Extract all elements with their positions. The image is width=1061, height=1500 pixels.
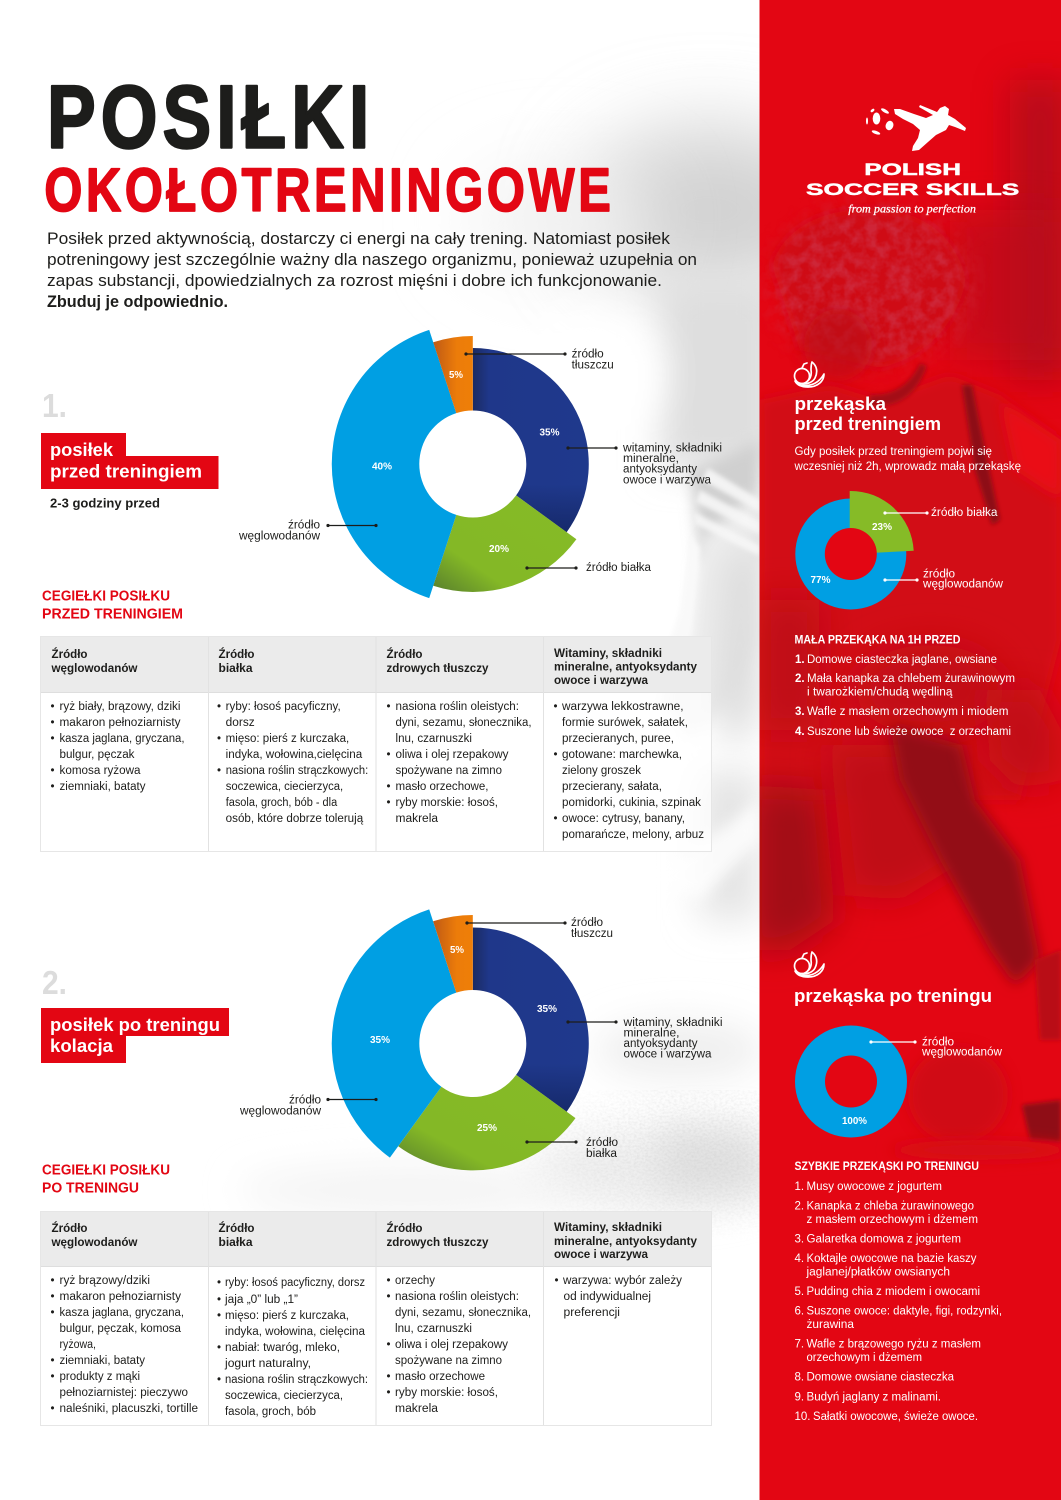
column: białko: Źródło: [218, 648, 254, 661]
slice: 25%: [398, 1075, 576, 1170]
intro text: Zbuduj je odpowiednio.: [47, 293, 228, 311]
column: tłuszcze: masło orzechowe,: [396, 781, 488, 793]
column: tłuszcze: makrela: [396, 813, 439, 825]
heading: cegiełki posiłku po treningu: PO TRENINGU: [42, 1180, 139, 1196]
column: witaminy: [554, 1222, 698, 1319]
list: szybkie przekąski po treningu: Sałatki owocowe, świeże owoce.: [813, 1411, 978, 1423]
column: białko: •: [217, 1374, 221, 1386]
column: witaminy: •: [554, 1275, 559, 1287]
column: witaminy: formie surówek, sałatek,: [562, 717, 688, 729]
intro text: zapas substancji, dpowiedzialnych za rozrost mięśni i dobre ich funkcjonowanie.: [47, 272, 662, 290]
column: węglowodany: •: [50, 781, 55, 793]
column: tłuszcze: Źródło: [386, 1222, 422, 1235]
column: witaminy: •: [554, 749, 558, 761]
column: węglowodany: naleśniki, placuszki, tortille: [60, 1403, 198, 1415]
column: węglowodany: kasza jaglana, gryczana,: [60, 1307, 184, 1319]
list: szybkie przekąski po treningu: 4.: [794, 1253, 804, 1265]
column: białko: •: [217, 1310, 221, 1322]
column: tłuszcze: lnu, czarnuszki: [396, 733, 472, 745]
chart hole: [825, 1056, 877, 1108]
label: posiłek po treningu kolacja: kolacja: [50, 1035, 114, 1056]
chart labels: mineralne,: [624, 1028, 680, 1040]
heading: przekąska po treningu: przekąska po treningu: [794, 985, 992, 1006]
column: witaminy: zielony groszek: [562, 765, 641, 777]
intro text: [47, 230, 697, 311]
chart labels: białka: [586, 1148, 618, 1160]
percentages: 35%: [537, 1003, 558, 1015]
list: szybkie przekąski po treningu: żurawina: [806, 1319, 855, 1331]
heading: POSIŁKI: POSIŁKI: [47, 68, 369, 167]
chart label: źródło: [922, 1036, 954, 1048]
list: szybkie przekąski po treningu: 3.: [794, 1234, 804, 1246]
column: tłuszcze: nasiona roślin oleistych:: [395, 1291, 519, 1303]
text: przekąska description: wczesniej niż 2h, wprowadz małą przekąskę: [793, 461, 1021, 473]
column: witaminy: od indywidualnej: [564, 1291, 651, 1303]
column: białko: •: [217, 1342, 221, 1354]
column: witaminy: •: [554, 701, 558, 713]
column: białko: •: [217, 765, 221, 777]
list: mała przekąska na 1h przed: 1.: [795, 654, 805, 666]
column: tłuszcze: spożywane na zimno: [396, 765, 502, 777]
chart labels: źródło białka: [586, 562, 652, 574]
column: węglowodany: ryżowa,: [60, 1339, 96, 1351]
chart labels: węglowodanów: [238, 530, 321, 542]
list: szybkie przekąski po treningu: 6.: [794, 1306, 804, 1318]
chart labels: źródło: [923, 568, 955, 580]
column: białko: •: [217, 733, 221, 745]
player photo in red duotone: [750, 80, 1061, 1160]
slice: 5%: [433, 336, 473, 413]
column: tłuszcze: •: [386, 781, 391, 793]
column: węglowodany: ryż brązowy/dziki: [60, 1275, 150, 1287]
text: przekąska description: [793, 446, 1021, 473]
list: mała przekąska na 1h przed: Mała kanapka za chlebem żurawinowym: [807, 673, 1015, 685]
list: mała przekąska na 1h przed: MAŁA PRZEKĄKA NA 1H PRZED: [794, 634, 960, 646]
heading: przekąska przed treningiem: przekąska: [794, 393, 887, 414]
list: szybkie przekąski po treningu: SZYBKIE PRZEKĄSKI PO TRENINGU: [794, 1161, 979, 1173]
column: węglowodany: ryż biały, brązowy, dziki: [60, 701, 180, 713]
column: węglowodany: ziemniaki, bataty: [60, 781, 146, 793]
slice: 35%: [473, 348, 589, 532]
column: białko: jaja „0” lub „1”: [224, 1294, 298, 1306]
column: węglowodany: •: [50, 1275, 55, 1287]
heading: cegiełki posiłku przed treningiem: CEGIEŁKI POSIŁKU: [42, 588, 170, 604]
list: mała przekąska na 1h przed: Domowe ciasteczka jaglane, owsiane: [807, 654, 997, 666]
percentages: [370, 944, 558, 1134]
column: węglowodany: •: [50, 1371, 55, 1383]
list: szybkie przekąski po treningu: [794, 1161, 1002, 1423]
heading: przekąska przed treningiem: [794, 393, 941, 434]
percentages: 35%: [370, 1034, 391, 1046]
list: szybkie przekąski po treningu: 7.: [794, 1338, 804, 1350]
column: witaminy: owoce: cytrusy, banany,: [562, 813, 685, 825]
column: białko: •: [217, 701, 221, 713]
intro text: Posiłek przed aktywnością, dostarczy ci energi na cały trening. Natomiast posiłek: [47, 230, 671, 248]
column: węglowodany: bulgur, pęczak: [60, 749, 135, 761]
section number 1: 1.: [42, 387, 67, 424]
background: grey player photo: [316, 94, 760, 1224]
column: białko: ryby: łosoś pacyficzny,: [226, 701, 341, 713]
list: szybkie przekąski po treningu: Wafle z brązowego ryżu z masłem: [806, 1338, 981, 1350]
column: witaminy: preferencji: [564, 1307, 620, 1319]
percentages: 23%: [872, 521, 893, 533]
logo: Polish Soccer Skills: SOCCER SKILLS: [806, 180, 1019, 199]
column: węglowodany: makaron pełnoziarnisty: [60, 1291, 181, 1303]
slice: 23%: [850, 491, 914, 554]
column: białko: nasiona roślin strączkowych:: [226, 765, 368, 777]
column: tłuszcze: •: [386, 1275, 391, 1287]
percentages: [372, 369, 560, 555]
heading: OKOŁOTRENINGOWE: OKOŁOTRENINGOWE: [44, 156, 611, 224]
chart labels: źródło: [288, 520, 320, 532]
column: białko: nasiona roślin strączkowych:: [225, 1374, 368, 1386]
percentages: 5%: [449, 369, 464, 381]
list: mała przekąska na 1h przed: i twarożkiem/chudą wędliną: [807, 686, 953, 698]
chart labels: [239, 917, 722, 1160]
heading: cegiełki posiłku przed treningiem: PRZED TRENINGIEM: [42, 606, 183, 622]
column: tłuszcze: [386, 648, 532, 825]
donut chart 4: [795, 1026, 1003, 1138]
chart labels: źródło: [586, 1137, 618, 1149]
column: witaminy: warzywa lekkostrawne,: [561, 701, 684, 713]
list: mała przekąska na 1h przed: Wafle z masłem orzechowym i miodem: [807, 706, 1008, 718]
column: tłuszcze: •: [386, 749, 391, 761]
percentages: 40%: [372, 460, 393, 472]
column: węglowodany: [50, 648, 184, 793]
column: węglowodany: makaron pełnoziarnisty: [60, 717, 181, 729]
column: witaminy: przecieranych, puree,: [562, 733, 674, 745]
list: szybkie przekąski po treningu: Koktajle owocowe na bazie kaszy: [806, 1253, 977, 1265]
column: tłuszcze: •: [386, 1291, 391, 1303]
chart labels: owoce i warzywa: [624, 1048, 712, 1060]
list: szybkie przekąski po treningu: Pudding chia z miodem i owocami: [806, 1286, 980, 1298]
chart labels: źródło białka: [931, 507, 998, 519]
logo tagline: from passion to perfection: [848, 202, 976, 216]
column: węglowodany: Źródło: [52, 1222, 88, 1235]
column: tłuszcze: spożywane na zimno: [395, 1355, 502, 1367]
list: mała przekąska na 1h przed: Suszone lub świeże owoce z orzechami: [807, 726, 1011, 738]
chart labels: witaminy, składniki: [622, 442, 722, 454]
column: tłuszcze: oliwa i olej rzepakowy: [396, 749, 509, 761]
heading: cegiełki posiłku po treningu: [42, 1162, 170, 1196]
column: białko: mięso: pierś z kurczaka,: [225, 1310, 349, 1322]
column: tłuszcze: makrela: [395, 1403, 439, 1415]
text: przekąska description: Gdy posiłek przed treningiem pojwi się: [794, 446, 992, 458]
icon: snack: [794, 952, 824, 977]
leader lines: [327, 353, 617, 569]
chart labels: tłuszczu: [572, 360, 614, 372]
percentages: 25%: [477, 1122, 498, 1134]
column: białko: indyka, wołowina,cielęcina: [226, 749, 363, 761]
column: tłuszcze: oliwa i olej rzepakowy: [395, 1339, 508, 1351]
column: tłuszcze: dyni, sezamu, słonecznika,: [395, 1307, 531, 1319]
leader line: [870, 1041, 916, 1043]
column: węglowodany: bulgur, pęczak, komosa: [60, 1323, 182, 1335]
icon: kicking player: [894, 105, 966, 151]
slice: 40%: [332, 330, 456, 598]
column: tłuszcze: •: [386, 701, 391, 713]
percentages: 5%: [450, 944, 465, 956]
list: szybkie przekąski po treningu: Domowe owsiane ciasteczka: [806, 1372, 955, 1384]
column: węglowodany: [50, 1222, 198, 1415]
slice: 5%: [433, 915, 473, 993]
column: węglowodany: Źródło: [52, 648, 88, 661]
table 2: [40, 1212, 712, 1426]
column: witaminy: owoce i warzywa: [554, 675, 649, 687]
chart labels: antyoksydanty: [623, 464, 697, 476]
heading: cegiełki posiłku po treningu: CEGIEŁKI POSIŁKU: [42, 1162, 170, 1178]
chart labels: antyoksydanty: [624, 1038, 698, 1050]
column: witaminy: •: [554, 813, 558, 825]
column: węglowodany: węglowodanów: [50, 1237, 138, 1249]
label: posiłek przed treningiem: przed treningiem: [50, 460, 202, 482]
title: [44, 68, 611, 224]
column: witaminy: warzywa: wybór zależy: [562, 1275, 682, 1287]
list: mała przekąska na 1h przed: 2.: [795, 673, 805, 685]
panel: red sidebar: [750, 0, 1061, 1500]
logo wordmark: POLISH: [864, 160, 961, 179]
column: tłuszcze: masło orzechowe: [395, 1371, 485, 1383]
column: białko: mięso: pierś z kurczaka,: [226, 733, 349, 745]
chart labels: witaminy, składniki: [622, 1017, 722, 1029]
list: szybkie przekąski po treningu: orzechowym i dżemem: [806, 1352, 922, 1364]
chart label: węglowodanów: [921, 1046, 1003, 1058]
column: tłuszcze: zdrowych tłuszczy: [386, 663, 489, 675]
column: tłuszcze: •: [386, 1371, 391, 1383]
column: witaminy: [554, 648, 704, 841]
column: tłuszcze: [386, 1222, 531, 1415]
chart labels: [238, 348, 722, 574]
chart label: [921, 1036, 1003, 1058]
list: szybkie przekąski po treningu: jaglanej/płatków owsianych: [805, 1266, 950, 1278]
list: szybkie przekąski po treningu: 1.: [794, 1181, 804, 1193]
column: węglowodany: •: [50, 733, 55, 745]
slice: 35% blue: [332, 909, 456, 1158]
list: szybkie przekąski po treningu: Musy owocowe z jogurtem: [806, 1181, 942, 1193]
column: węglowodany: produkty z mąki: [60, 1371, 140, 1383]
slice: 35%: [473, 928, 589, 1112]
chart labels: węglowodanów: [922, 578, 1004, 590]
column: witaminy: Witaminy, składniki: [554, 1222, 662, 1234]
column: witaminy: mineralne, antyoksydanty: [554, 662, 698, 674]
column: białko: [217, 1222, 368, 1418]
column: białko: indyka, wołowina, cielęcina: [225, 1326, 366, 1338]
list: mała przekąska na 1h przed: 4.: [795, 726, 805, 738]
percentages: 35%: [540, 426, 560, 438]
column: tłuszcze: orzechy: [395, 1275, 435, 1287]
column: węglowodany: kasza jaglana, gryczana,: [60, 733, 184, 745]
section number 2: 2.: [42, 964, 67, 1001]
column: białko: białka: [218, 1237, 253, 1249]
column: węglowodany: •: [50, 1403, 55, 1415]
list: szybkie przekąski po treningu: 2.: [794, 1200, 804, 1212]
column: białko: nabiał: twaróg, mleko,: [225, 1342, 340, 1354]
list: szybkie przekąski po treningu: 9.: [794, 1392, 804, 1404]
column: białko: Źródło: [218, 1222, 254, 1235]
column: węglowodany: komosa ryżowa: [60, 765, 141, 777]
chart labels: źródło: [572, 348, 604, 360]
label: posiłek przed treningiem: [41, 433, 218, 489]
list: szybkie przekąski po treningu: Galaretka domowa z jogurtem: [806, 1234, 961, 1246]
column: witaminy: mineralne, antyoksydanty: [554, 1236, 698, 1248]
chart labels: węglowodanów: [239, 1106, 322, 1118]
column: tłuszcze: •: [386, 1339, 391, 1351]
list: mała przekąska na 1h przed: [794, 634, 1015, 738]
chart labels: mineralne,: [623, 453, 679, 465]
column: węglowodany: •: [50, 1355, 55, 1367]
leader lines: [327, 922, 617, 1143]
column: białko: dorsz: [226, 717, 255, 729]
column: białko: soczewica, ciecierzyca,: [225, 1390, 343, 1402]
heading: cegiełki posiłku przed treningiem: [42, 588, 183, 622]
percentage: 100%: [842, 1115, 868, 1127]
donut chart 3: [795, 491, 1004, 610]
list: mała przekąska na 1h przed: 3.: [795, 706, 805, 718]
donut chart 1: [238, 330, 722, 598]
column: witaminy: gotowane: marchewka,: [562, 749, 682, 761]
leader lines: [884, 512, 928, 581]
column: białko: [217, 648, 368, 825]
column: tłuszcze: zdrowych tłuszczy: [386, 1237, 489, 1249]
column: witaminy: pomarańcze, melony, arbuz: [562, 829, 704, 841]
label: posiłek przed treningiem: posiłek: [50, 439, 114, 460]
column: tłuszcze: lnu, czarnuszki: [395, 1323, 472, 1335]
column: węglowodany: węglowodanów: [50, 663, 138, 675]
column: białko: soczewica, ciecierzyca,: [226, 781, 343, 793]
percentages: [810, 521, 893, 586]
column: węglowodany: •: [50, 701, 55, 713]
chart labels: owoce i warzywa: [623, 474, 712, 486]
list: szybkie przekąski po treningu: 8.: [794, 1372, 804, 1384]
column: węglowodany: •: [50, 1307, 55, 1319]
column: tłuszcze: ryby morskie: łosoś,: [395, 1387, 498, 1399]
column: węglowodany: •: [50, 1291, 55, 1303]
icon: ball: [866, 107, 895, 136]
column: białko: fasola, groch, bób - dla: [226, 797, 338, 809]
percentages: 77%: [810, 574, 831, 586]
column: witaminy: owoce i warzywa: [554, 1249, 649, 1261]
icon: snack: [794, 362, 824, 387]
column: białko: osób, które dobrze tolerują: [226, 813, 364, 825]
donut chart 2: [239, 909, 722, 1170]
column: witaminy: przecierany, sałata,: [562, 781, 662, 793]
column: witaminy: pomidorki, cukinia, szpinak: [562, 797, 701, 809]
column: tłuszcze: dyni, sezamu, słonecznika,: [396, 717, 532, 729]
column: białko: jogurt naturalny,: [224, 1358, 311, 1370]
logo: Polish Soccer Skills: [806, 105, 1019, 216]
list: szybkie przekąski po treningu: z masłem orzechowym i dżemem: [806, 1214, 978, 1226]
column: tłuszcze: Źródło: [386, 648, 422, 661]
subheading: 2-3 godziny przed: 2-3 godziny przed: [50, 496, 160, 510]
column: białko: fasola, groch, bób: [225, 1406, 316, 1418]
column: tłuszcze: •: [386, 797, 391, 809]
chart labels: [922, 507, 1004, 590]
slice: 20%: [433, 495, 576, 592]
chart labels: tłuszczu: [571, 928, 613, 940]
label: posiłek po treningu kolacja: [41, 1008, 229, 1063]
table 1: [40, 636, 712, 852]
chart hole: [825, 528, 877, 580]
heading: przekąska przed treningiem: przed treningiem: [794, 413, 941, 434]
slice: 100%: [795, 1026, 907, 1138]
list: szybkie przekąski po treningu: Budyń jaglany z malinami.: [806, 1392, 941, 1404]
column: białko: •: [217, 1277, 221, 1289]
column: witaminy: Witaminy, składniki: [554, 648, 662, 660]
label: posiłek po treningu kolacja: posiłek po treningu: [50, 1014, 220, 1035]
list: szybkie przekąski po treningu: 5.: [794, 1286, 804, 1298]
column: tłuszcze: nasiona roślin oleistych:: [396, 701, 519, 713]
intro text: potreningowy jest szczególnie ważny dla naszego organizmu, ponieważ uzupełnia on: [47, 251, 697, 269]
column: tłuszcze: ryby morskie: łosoś,: [396, 797, 498, 809]
list: szybkie przekąski po treningu: Suszone owoce: daktyle, figi, rodzynki,: [806, 1306, 1002, 1318]
chart labels: źródło: [571, 917, 603, 929]
column: węglowodany: pełnoziarnistej: pieczywo: [60, 1387, 188, 1399]
column: białko: ryby: łosoś pacyficzny, dorsz: [225, 1277, 365, 1289]
percentages: 20%: [489, 543, 510, 555]
column: białko: białka: [218, 663, 253, 675]
chart labels: źródło: [289, 1094, 321, 1106]
slice: 77%: [795, 498, 906, 610]
list: szybkie przekąski po treningu: 10.: [794, 1411, 810, 1423]
column: węglowodany: •: [50, 765, 55, 777]
column: węglowodany: •: [50, 717, 55, 729]
column: tłuszcze: •: [386, 1387, 391, 1399]
list: szybkie przekąski po treningu: Kanapka z chleba żurawinowego: [806, 1200, 974, 1212]
column: węglowodany: ziemniaki, bataty: [60, 1355, 145, 1367]
column: białko: •: [217, 1294, 221, 1306]
